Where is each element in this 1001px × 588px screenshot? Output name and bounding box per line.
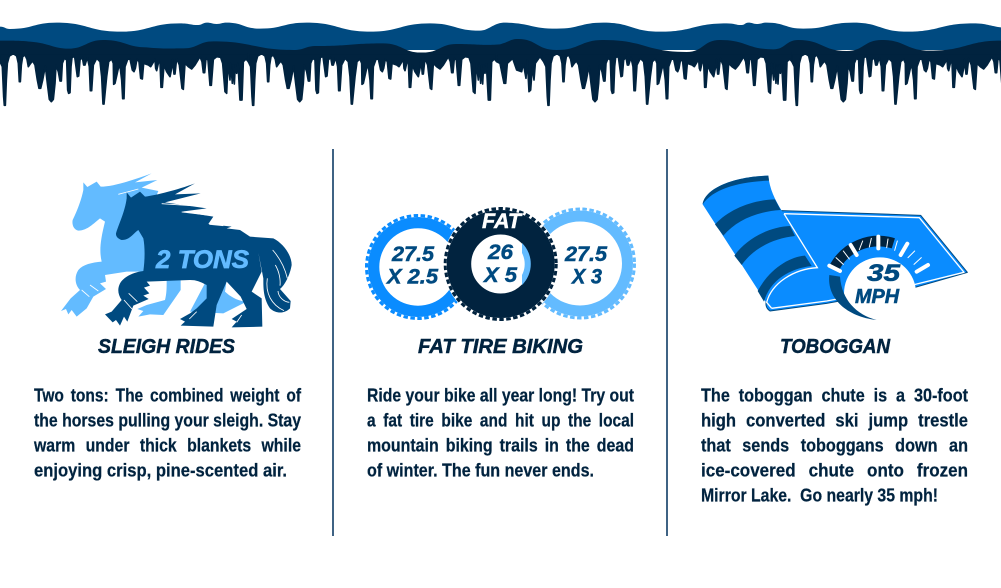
roll curl outline: [767, 214, 817, 308]
column divider right: [666, 149, 668, 536]
dark horse strands: [124, 204, 289, 322]
icon: three bike tires: [366, 206, 634, 322]
label: left tire size: [386, 243, 438, 288]
label: left tire size: X 2.5: [386, 266, 438, 288]
speedometer dark arc: [834, 241, 893, 268]
text block: toboggan: ice-covered chute onto frozen: [701, 460, 968, 480]
heading: sleigh rides: SLEIGH RIDES: [98, 336, 236, 358]
label: fat tire size: X 5: [483, 264, 517, 287]
label: right tire size: [564, 243, 607, 288]
text block: fat tire biking: [367, 384, 634, 480]
text block: toboggan: [701, 384, 968, 506]
heading: fat tire biking: FAT TIRE BIKING: [418, 336, 583, 358]
text block: fat tire biking: a fat tire bike and hit up the local: [367, 410, 634, 430]
panel: fat tire biking: [366, 206, 634, 480]
text block: toboggan: The toboggan chute is a 30-foot: [701, 384, 968, 406]
text block: fat tire biking: of winter. The fun never ends.: [367, 460, 594, 480]
text block: sleigh rides: Two tons: The combined weight of: [34, 384, 302, 406]
label: right tire size: X 3: [571, 266, 602, 288]
light blue horse: [61, 173, 247, 317]
dark icicle layer: [0, 39, 1001, 105]
speedometer hub: [844, 257, 916, 329]
label: left tire size: 27.5: [391, 243, 434, 266]
right tire: [526, 209, 634, 318]
speed unit: MPH: [855, 286, 900, 308]
label: right tire size: 27.5: [564, 243, 607, 266]
label: fat: FAT: [482, 210, 523, 233]
mid blue snow band: [0, 23, 1001, 50]
dark blue horse: [105, 183, 292, 327]
speedometer swoosh: [829, 275, 877, 320]
speedometer ticks: [829, 237, 928, 272]
text block: toboggan: that sends toboggans down an: [701, 434, 968, 456]
text block: toboggan: Mirror Lake. Go nearly 35 mph!: [701, 484, 938, 506]
text block: sleigh rides: [33, 384, 302, 480]
text block: fat tire biking: mountain biking trails in the dead: [367, 434, 634, 456]
text block: toboggan: high converted ski jump trestle: [701, 410, 968, 430]
horse weight label: 2 TONS: [155, 246, 249, 274]
icon: toboggan chute with speedometer: [703, 176, 967, 329]
icon: two horses: [61, 173, 292, 327]
heading: toboggan: TOBOGGAN: [780, 336, 891, 358]
column divider left: [332, 149, 334, 536]
label: fat tire size: [483, 241, 517, 287]
flat chute sheet: [766, 211, 967, 311]
label: fat tire size: 26: [487, 241, 513, 264]
text block: sleigh rides: enjoying crisp, pine-scented air.: [34, 460, 287, 480]
panel: sleigh rides: [33, 173, 302, 480]
text block: sleigh rides: the horses pulling your sleigh. Stay: [34, 410, 302, 430]
centre fat tire: [443, 206, 558, 322]
text block: fat tire biking: Ride your bike all year long! Try out: [367, 384, 634, 406]
light horse strands: [82, 189, 245, 301]
speed value: 35: [867, 260, 901, 287]
rolled chute: [703, 176, 817, 302]
panel: toboggan: [701, 176, 968, 506]
icicle header band: [0, 23, 1001, 105]
roll stripes: [703, 176, 812, 302]
left tire: [366, 216, 470, 318]
text block: sleigh rides: warm under thick blankets while: [33, 434, 301, 456]
